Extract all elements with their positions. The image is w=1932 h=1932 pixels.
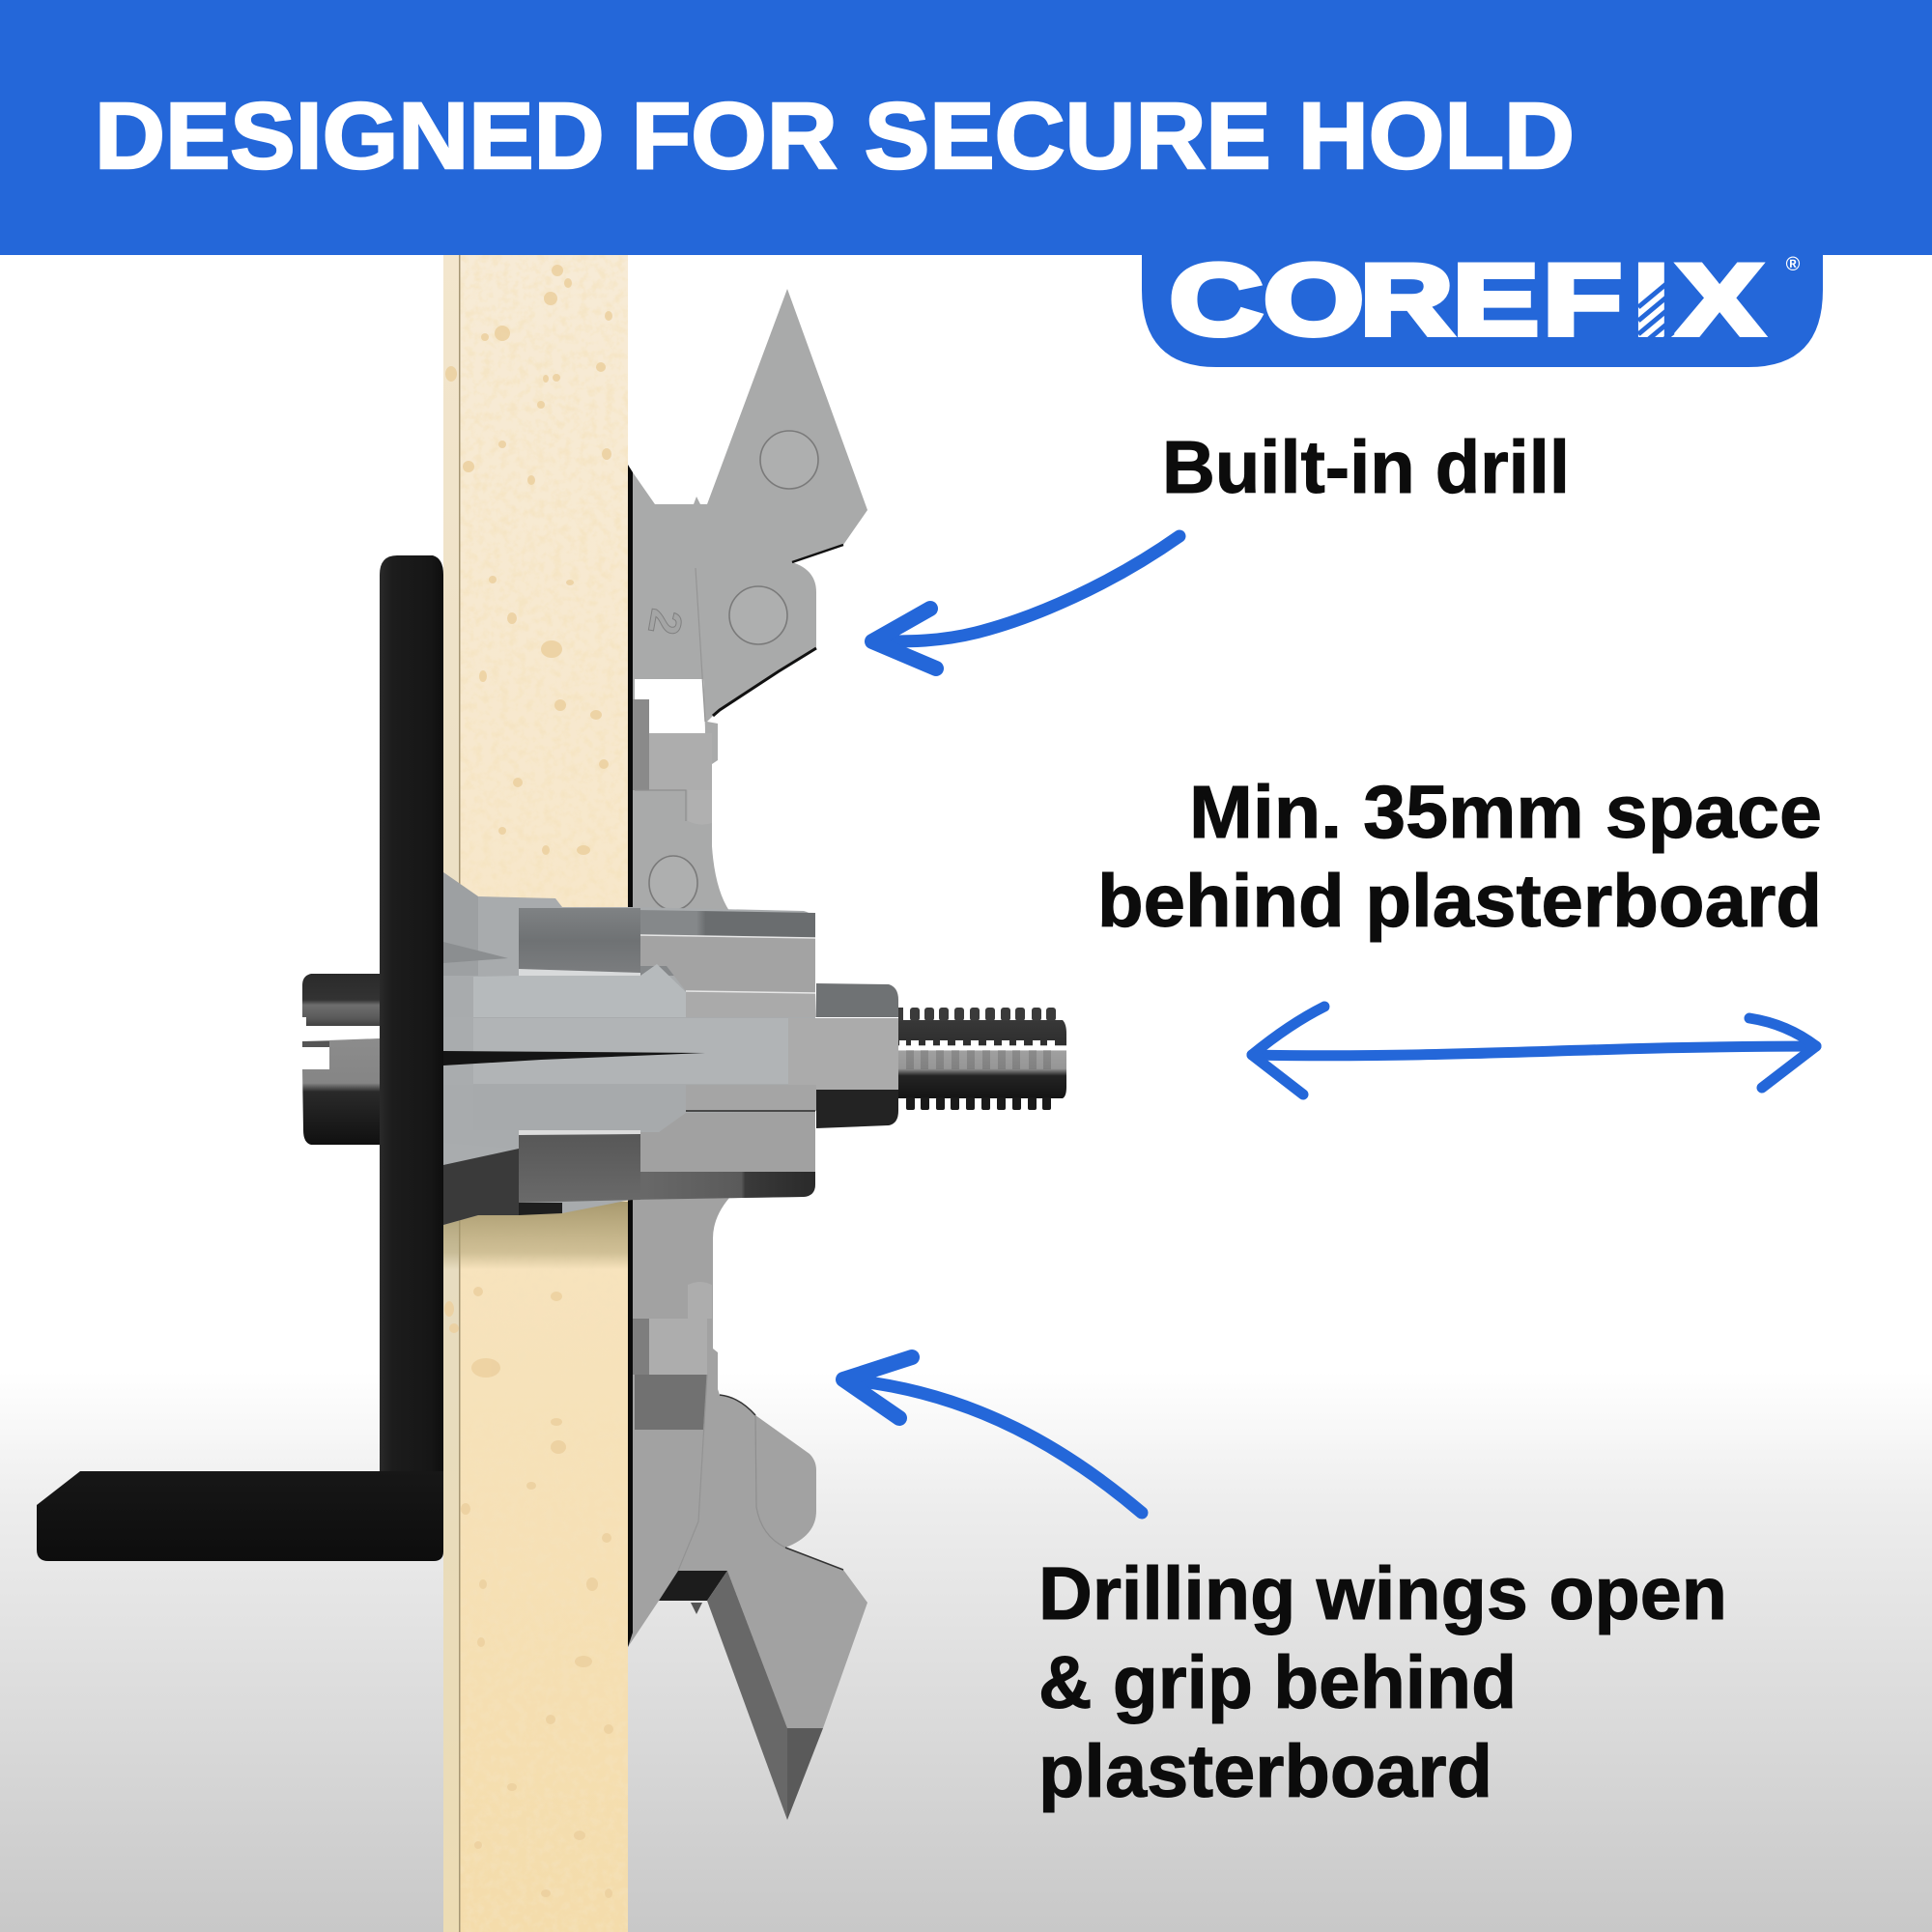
wall contact edge: [628, 465, 633, 908]
split slot: [443, 1051, 705, 1065]
header banner: [0, 0, 1932, 255]
embossed number: 2: [639, 606, 693, 639]
label: drilling wings: & grip behind: [1038, 1641, 1517, 1724]
arrow: to built-in drill: [872, 536, 1179, 668]
label: drilling wings: plasterboard: [1038, 1730, 1492, 1813]
logo drill stripes: [1638, 278, 1673, 348]
logo wordmark: COREFIX: [1170, 244, 1762, 356]
hex nut: [816, 983, 898, 1017]
arrow: to drilling wings: [843, 1357, 1142, 1513]
label: minimum space: behind plasterboard: [1097, 860, 1822, 943]
lower drilling wing: [628, 1198, 867, 1820]
wing bevel: [707, 1571, 787, 1820]
label: built-in drill: Built-in drill: [1162, 426, 1570, 509]
plasterboard wall: [443, 255, 628, 1932]
label: drilling wings: Drilling wings open: [1038, 1552, 1727, 1635]
label: drilling wings: [1038, 1552, 1727, 1813]
anchor body: [443, 872, 898, 1225]
registered mark: ®: [1786, 254, 1801, 275]
upper drilling wing: [628, 289, 867, 911]
rivet dimples: [649, 431, 818, 910]
label: minimum space: [1097, 771, 1822, 943]
wing underside: [659, 1571, 727, 1601]
label: minimum space: Min. 35mm space: [1189, 771, 1822, 854]
title: DESIGNED FOR SECURE HOLD: [95, 83, 1575, 188]
logo badge: [1142, 244, 1823, 367]
arrow: double-headed 35mm span: [1252, 1007, 1816, 1094]
screw head: [302, 974, 380, 1145]
black mounting bracket: [37, 555, 443, 1561]
threaded bolt: [898, 1008, 1066, 1110]
